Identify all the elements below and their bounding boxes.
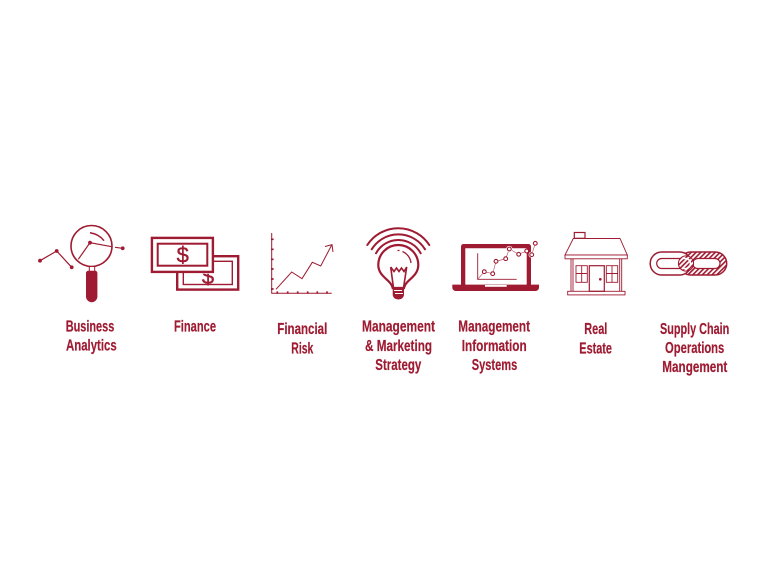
label: Supply Chain Operations Mangement — [660, 321, 729, 376]
label: Financial Risk: Financial — [277, 321, 327, 338]
panel: management and marketing strategy — [362, 228, 436, 374]
icon: banknotes: $ — [177, 242, 189, 268]
label: Business Analytics — [66, 319, 117, 355]
icon: rising line chart — [271, 233, 333, 294]
icon: banknotes — [152, 238, 238, 290]
infographic — [38, 224, 729, 376]
label: Supply Chain Operations Mangement: Operations — [665, 340, 724, 357]
label: Management Information Systems: Systems — [472, 357, 517, 374]
label: Real Estate: Estate — [579, 340, 612, 357]
label: Management Information Systems: Information — [462, 338, 527, 355]
label: Management Information Systems — [458, 319, 530, 374]
icon: magnifying glass over line chart — [38, 226, 125, 302]
panel: business analytics — [38, 226, 125, 355]
panel: management information systems — [452, 241, 539, 374]
label: Real Estate — [579, 321, 612, 357]
label: Business Analytics: Business — [66, 319, 114, 336]
label: Business Analytics: Analytics — [66, 338, 117, 355]
panel: supply chain operations management — [650, 252, 729, 376]
label: Management & Marketing Strategy: & Marketing — [365, 338, 432, 355]
panel: finance — [152, 238, 238, 336]
panel: real estate — [565, 232, 627, 357]
label: Supply Chain Operations Mangement: Mangement — [662, 359, 728, 376]
label: Financial Risk — [277, 321, 327, 357]
label: Management & Marketing Strategy: Management — [362, 319, 436, 336]
label: Management & Marketing Strategy — [362, 319, 436, 374]
icon: laptop with chart — [452, 241, 539, 291]
icon: light bulb with signal arcs — [367, 228, 429, 300]
panel: financial risk — [271, 233, 333, 357]
label: Management Information Systems: Management — [458, 319, 530, 336]
label: Real Estate: Real — [584, 321, 607, 338]
icon: banknotes: $ — [202, 264, 214, 289]
label: Management & Marketing Strategy: Strategy — [375, 357, 421, 374]
icon: house — [565, 232, 627, 295]
label: Financial Risk: Risk — [291, 340, 313, 357]
label: Finance: Finance — [174, 319, 216, 336]
label: Supply Chain Operations Mangement: Supply Chain — [660, 321, 729, 338]
icon: chain links — [650, 252, 727, 275]
